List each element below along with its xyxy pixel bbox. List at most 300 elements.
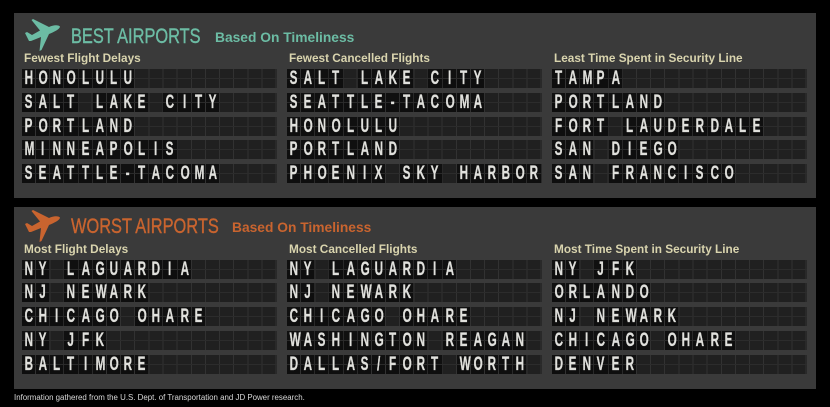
row: Salt Lake City: E: [138, 91, 146, 113]
row: NY JFK: K: [625, 258, 634, 280]
row: Honolulu: [287, 116, 542, 136]
row: Chicago O'Hare: O: [374, 305, 384, 327]
row: Chicago O'Hare: I: [55, 305, 58, 327]
row: Washington Reagan: R: [445, 329, 454, 351]
row: Minneapolis: I: [41, 138, 44, 160]
row: Chicago O'Hare: A: [166, 305, 174, 327]
row: Minneapolis: N: [67, 138, 76, 160]
row: NJ Newark: E: [81, 281, 89, 303]
row: Washington Reagan: T: [389, 329, 396, 351]
row: NY LaGuardia: D: [417, 258, 425, 280]
row: NY LaGuardia: U: [109, 258, 118, 280]
row: NY LaGuardia: L: [67, 258, 75, 280]
heading: best airports: BEST AIRPORTS: [71, 24, 201, 48]
row: Salt Lake City: [22, 93, 277, 112]
row: Honolulu: N: [318, 114, 326, 136]
row: Fort Lauderdale: E: [753, 114, 760, 136]
row: Washington Reagan: [287, 331, 542, 350]
row: Honolulu: L: [82, 67, 89, 89]
row: Dallas/Fort Worth: W: [459, 352, 470, 374]
row: NJ Newark: N: [67, 281, 76, 303]
row: Seattle-Tacoma: A: [152, 162, 160, 184]
row: Salt Lake City: K: [389, 67, 397, 89]
row: Dallas/Fort Worth: A: [346, 352, 355, 374]
row: Seattle-Tacoma: [22, 164, 277, 183]
row: Chicago O'Hare: H: [569, 329, 577, 351]
row: Seattle-Tacoma: O: [445, 91, 454, 113]
row: Portland: R: [583, 91, 591, 113]
row: Dallas/Fort Worth: [287, 354, 542, 374]
row: NY LaGuardia: A: [346, 258, 355, 280]
row: Baltimore: O: [109, 352, 119, 374]
row: Salt Lake City: K: [124, 91, 132, 113]
row: Chicago O'Hare: E: [724, 329, 732, 351]
row: Chicago O'Hare: R: [710, 329, 719, 351]
row: Chicago O'Hare: A: [431, 305, 439, 327]
row: San Diego: D: [611, 138, 620, 160]
row: Denver: E: [611, 352, 619, 374]
row: San Diego: A: [569, 138, 577, 160]
row: NY LaGuardia: A: [180, 258, 189, 280]
row: NY LaGuardia: N: [25, 258, 33, 280]
row: Phoenix Sky Harbor: [287, 164, 542, 183]
column heading: Most Flight Delays: [24, 242, 128, 256]
row: Seattle-Tacoma: M: [194, 162, 204, 184]
row: Denver: D: [555, 352, 563, 374]
row: Fort Lauderdale: U: [654, 114, 662, 136]
row: Portland: D: [389, 138, 397, 160]
row: Dallas/Fort Worth: L: [332, 352, 340, 374]
row: Dallas/Fort Worth: A: [304, 352, 312, 374]
row: Fort Lauderdale: L: [626, 114, 633, 136]
row: Seattle-Tacoma: A: [53, 162, 61, 184]
row: Portland: N: [109, 114, 118, 136]
row: Washington Reagan: W: [290, 329, 301, 351]
row: San Diego: E: [640, 138, 647, 160]
row: San Francisco: S: [696, 162, 704, 184]
row: Salt Lake City: S: [25, 91, 32, 113]
row: Fort Lauderdale: F: [555, 114, 562, 136]
row: NJ Newark: R: [654, 305, 662, 327]
row: Dallas/Fort Worth: T: [502, 352, 509, 374]
row: NY JFK: N: [555, 258, 563, 280]
row: Honolulu: L: [110, 67, 117, 89]
row: Portland: P: [290, 138, 297, 160]
row: Salt Lake City: Y: [208, 91, 216, 113]
row: Tampa: A: [569, 67, 577, 89]
row: Chicago O'Hare: E: [194, 305, 202, 327]
row: Chicago O'Hare: I: [585, 329, 588, 351]
row: Honolulu: H: [290, 114, 298, 136]
row: Phoenix Sky Harbor: H: [304, 162, 312, 184]
row: NY JFK: J: [68, 329, 74, 351]
row: Salt Lake City: S: [290, 67, 297, 89]
row: Chicago O'Hare: G: [360, 305, 369, 327]
row: Washington Reagan: A: [473, 329, 482, 351]
row: San Francisco: O: [724, 162, 733, 184]
row: Honolulu: L: [375, 114, 382, 136]
row: Chicago O'Hare: C: [290, 305, 298, 327]
row: San Francisco: I: [684, 162, 687, 184]
row: Phoenix Sky Harbor: I: [363, 162, 366, 184]
row: Chicago O'Hare: C: [332, 305, 341, 327]
row: Honolulu: U: [389, 114, 397, 136]
row: Phoenix Sky Harbor: X: [375, 162, 382, 184]
row: Phoenix Sky Harbor: N: [346, 162, 355, 184]
row: Chicago O'Hare: [22, 307, 277, 326]
row: Dallas/Fort Worth: F: [389, 352, 396, 374]
row: Fort Lauderdale: [552, 116, 807, 136]
row: San Francisco: C: [710, 162, 719, 184]
row: Phoenix Sky Harbor: Y: [431, 162, 439, 184]
row: Phoenix Sky Harbor: P: [290, 162, 297, 184]
row: Salt Lake City: A: [109, 91, 118, 113]
row: Phoenix Sky Harbor: B: [502, 162, 510, 184]
row: Baltimore: M: [95, 352, 105, 374]
row: Seattle-Tacoma: S: [25, 162, 32, 184]
row: Chicago O'Hare: R: [445, 305, 454, 327]
row: Minneapolis: L: [138, 138, 145, 160]
row: Seattle-Tacoma: -: [126, 162, 130, 184]
row: San Francisco: [552, 164, 807, 183]
row: Salt Lake City: Y: [473, 67, 481, 89]
row: Chicago O'Hare: O: [668, 329, 677, 351]
row: NY LaGuardia: A: [389, 258, 397, 280]
row: Salt Lake City: A: [39, 91, 47, 113]
column heading: Most Cancelled Flights: [289, 242, 417, 256]
row: Salt Lake City: L: [96, 91, 103, 113]
row: Baltimore: B: [25, 352, 33, 374]
row: NY LaGuardia: R: [403, 258, 411, 280]
icon: teal airplane: [25, 19, 60, 51]
row: Salt Lake City: T: [67, 91, 75, 113]
row: NJ Newark: A: [639, 305, 648, 327]
row: Portland: T: [597, 91, 605, 113]
row: NY JFK: F: [82, 329, 89, 351]
column: fewest cancelled flights: [287, 51, 542, 184]
row: Chicago O'Hare: H: [304, 305, 312, 327]
row: Portland: R: [318, 138, 326, 160]
row: Chicago O'Hare: A: [346, 305, 355, 327]
row: Seattle-Tacoma: S: [290, 91, 297, 113]
row: NY LaGuardia: G: [360, 258, 369, 280]
row: Honolulu: H: [25, 67, 33, 89]
row: Salt Lake City: C: [166, 91, 174, 113]
row: Tampa: [552, 69, 807, 88]
column heading: Least Time Spent in Security Line: [554, 51, 743, 65]
row: NY LaGuardia: A: [124, 258, 132, 280]
row: Washington Reagan: O: [403, 329, 412, 351]
row: Baltimore: T: [67, 352, 75, 374]
subheading: based on timeliness: Based On Timeliness: [215, 30, 354, 45]
heading: worst airports: WORST AIRPORTS: [71, 215, 219, 238]
row: Seattle-Tacoma: T: [347, 91, 354, 113]
row: NY LaGuardia: Y: [304, 258, 312, 280]
row: Fort Lauderdale: D: [668, 114, 676, 136]
row: NY JFK: F: [612, 258, 619, 280]
column: most flight delays: [22, 242, 277, 374]
row: Chicago O'Hare: C: [555, 329, 563, 351]
column: least time in security line: [552, 51, 807, 184]
row: Tampa: A: [611, 67, 620, 89]
row: San Francisco: C: [668, 162, 676, 184]
row: NY JFK: J: [598, 258, 604, 280]
row: San Diego: I: [628, 138, 631, 160]
row: Honolulu: U: [95, 67, 104, 89]
row: Honolulu: O: [67, 67, 76, 89]
row: Seattle-Tacoma: A: [473, 91, 482, 113]
column heading: Most Time Spent in Security Line: [554, 242, 739, 256]
row: Phoenix Sky Harbor: S: [403, 162, 411, 184]
row: Minneapolis: E: [81, 138, 89, 160]
row: Washington Reagan: G: [374, 329, 384, 351]
row: Chicago O'Hare: O: [138, 305, 147, 327]
row: Denver: V: [597, 352, 605, 374]
row: Portland: A: [625, 91, 634, 113]
row: Dallas/Fort Worth: O: [403, 352, 412, 374]
row: Washington Reagan: S: [318, 329, 326, 351]
row: Seattle-Tacoma: E: [375, 91, 382, 113]
row: Salt Lake City: [287, 69, 542, 88]
row: Portland: A: [360, 138, 369, 160]
row: Minneapolis: P: [110, 138, 117, 160]
row: NJ Newark: R: [389, 281, 397, 303]
row: Fort Lauderdale: L: [739, 114, 746, 136]
row: Honolulu: O: [39, 67, 48, 89]
row: Seattle-Tacoma: -: [391, 91, 394, 113]
row: Orlando: A: [597, 281, 606, 303]
row: Honolulu: O: [332, 114, 341, 136]
row: NJ Newark: W: [95, 281, 106, 303]
row: Phoenix Sky Harbor: O: [318, 162, 327, 184]
row: NJ Newark: J: [304, 281, 311, 303]
row: NY LaGuardia: I: [433, 258, 437, 280]
row: Portland: [287, 140, 542, 159]
row: Washington Reagan: N: [417, 329, 425, 351]
row: Dallas/Fort Worth: R: [488, 352, 496, 374]
row: Orlando: O: [639, 281, 649, 303]
row: NJ Newark: J: [569, 305, 576, 327]
row: Tampa: P: [597, 67, 605, 89]
row: Seattle-Tacoma: M: [459, 91, 469, 113]
row: San Francisco: A: [569, 162, 577, 184]
column: most cancelled flights: [287, 242, 542, 374]
row: Portland: O: [39, 114, 48, 136]
row: NJ Newark: N: [597, 305, 606, 327]
row: Honolulu: L: [347, 114, 354, 136]
row: NJ Newark: [22, 283, 277, 302]
row: Chicago O'Hare: H: [682, 329, 690, 351]
row: Dallas/Fort Worth: H: [516, 352, 524, 374]
row: Tampa: T: [555, 67, 562, 89]
row: Denver: R: [625, 352, 634, 374]
row: Washington Reagan: N: [360, 329, 369, 351]
row: Dallas/Fort Worth: O: [473, 352, 483, 374]
row: Baltimore: E: [138, 352, 146, 374]
row: Honolulu: [22, 69, 277, 88]
row: NJ Newark: A: [374, 281, 383, 303]
row: Chicago O'Hare: O: [639, 329, 649, 351]
row: Seattle-Tacoma: T: [403, 91, 410, 113]
row: Chicago O'Hare: I: [320, 305, 323, 327]
row: Chicago O'Hare: O: [403, 305, 412, 327]
row: Orlando: L: [583, 281, 590, 303]
row: Phoenix Sky Harbor: H: [459, 162, 468, 184]
row: Chicago O'Hare: [552, 331, 807, 350]
row: NJ Newark: [552, 307, 807, 326]
row: Baltimore: L: [53, 352, 60, 374]
row: NY LaGuardia: [287, 260, 542, 278]
row: Portland: D: [124, 114, 132, 136]
row: San Diego: S: [555, 138, 562, 160]
row: Portland: L: [612, 91, 619, 113]
row: Chicago O'Hare: E: [459, 305, 467, 327]
row: Chicago O'Hare: A: [611, 329, 620, 351]
row: Minneapolis: M: [25, 138, 34, 160]
row: NY LaGuardia: Y: [39, 258, 47, 280]
row: Honolulu: O: [304, 114, 313, 136]
row: NY LaGuardia: I: [168, 258, 172, 280]
row: NY LaGuardia: [22, 260, 277, 278]
row: Salt Lake City: T: [195, 91, 202, 113]
row: Fort Lauderdale: D: [710, 114, 719, 136]
row: Portland: D: [654, 91, 662, 113]
row: NY JFK: [22, 331, 277, 350]
row: NY LaGuardia: U: [374, 258, 383, 280]
row: Salt Lake City: T: [332, 67, 340, 89]
column: fewest flight delays: [22, 51, 277, 184]
row: NY JFK: Y: [39, 329, 47, 351]
row: NJ Newark: W: [625, 305, 636, 327]
row: Portland: P: [25, 114, 32, 136]
row: Orlando: R: [569, 281, 577, 303]
subheading: based on timeliness: Based On Timeliness: [232, 220, 371, 235]
row: Chicago O'Hare: H: [417, 305, 425, 327]
row: Washington Reagan: A: [304, 329, 312, 351]
column heading: Fewest Cancelled Flights: [289, 51, 430, 65]
row: Portland: L: [82, 114, 89, 136]
row: Orlando: D: [625, 281, 634, 303]
row: NY LaGuardia: A: [81, 258, 90, 280]
row: Portland: O: [304, 138, 313, 160]
row: Minneapolis: N: [53, 138, 61, 160]
row: NJ Newark: K: [668, 305, 676, 327]
row: NJ Newark: N: [332, 281, 341, 303]
row: San Francisco: A: [639, 162, 648, 184]
row: Denver: E: [569, 352, 577, 374]
row: Chicago O'Hare: H: [39, 305, 47, 327]
row: Denver: [552, 354, 807, 374]
row: NY LaGuardia: G: [95, 258, 104, 280]
row: Phoenix Sky Harbor: R: [530, 162, 538, 184]
row: NY LaGuardia: L: [332, 258, 340, 280]
row: NY LaGuardia: A: [445, 258, 454, 280]
row: Phoenix Sky Harbor: K: [417, 162, 425, 184]
row: NJ Newark: E: [346, 281, 354, 303]
row: Chicago O'Hare: G: [95, 305, 104, 327]
row: Dallas/Fort Worth: L: [318, 352, 325, 374]
row: Fort Lauderdale: R: [583, 114, 591, 136]
row: NJ Newark: E: [611, 305, 619, 327]
row: Chicago O'Hare: H: [152, 305, 160, 327]
row: Honolulu: U: [124, 67, 132, 89]
row: NJ Newark: R: [124, 281, 132, 303]
row: Washington Reagan: E: [459, 329, 467, 351]
row: Seattle-Tacoma: [287, 93, 542, 112]
row: Seattle-Tacoma: E: [110, 162, 117, 184]
row: Seattle-Tacoma: A: [318, 91, 326, 113]
row: NJ Newark: N: [25, 281, 33, 303]
row: Seattle-Tacoma: L: [361, 91, 368, 113]
row: Minneapolis: A: [95, 138, 104, 160]
row: Minneapolis: I: [154, 138, 157, 160]
row: NJ Newark: N: [290, 281, 298, 303]
row: Portland: R: [53, 114, 61, 136]
row: Denver: N: [583, 352, 591, 374]
row: Phoenix Sky Harbor: R: [488, 162, 496, 184]
row: Fort Lauderdale: O: [569, 114, 578, 136]
row: Fort Lauderdale: R: [696, 114, 704, 136]
row: Portland: A: [95, 114, 104, 136]
row: Dallas/Fort Worth: /: [377, 352, 380, 374]
row: NY LaGuardia: D: [152, 258, 160, 280]
row: Portland: N: [639, 91, 648, 113]
row: Portland: P: [555, 91, 562, 113]
row: Minneapolis: O: [124, 138, 133, 160]
panel: best airports: [14, 13, 816, 198]
row: Chicago O'Hare: A: [696, 329, 704, 351]
panel: worst airports: [14, 207, 816, 389]
row: Washington Reagan: N: [516, 329, 524, 351]
row: Chicago O'Hare: O: [109, 305, 119, 327]
row: Seattle-Tacoma: T: [82, 162, 89, 184]
row: Salt Lake City: C: [431, 67, 439, 89]
icon: orange airplane: [25, 210, 60, 242]
column heading: Fewest Flight Delays: [24, 51, 141, 65]
row: Dallas/Fort Worth: D: [290, 352, 298, 374]
row: Phoenix Sky Harbor: E: [332, 162, 340, 184]
row: Washington Reagan: A: [502, 329, 510, 351]
row: San Francisco: F: [612, 162, 619, 184]
row: Salt Lake City: L: [318, 67, 325, 89]
row: Fort Lauderdale: E: [682, 114, 690, 136]
row: NJ Newark: [287, 283, 542, 302]
row: Orlando: N: [611, 281, 620, 303]
row: Portland: [22, 116, 277, 136]
row: Baltimore: R: [124, 352, 132, 374]
row: Fort Lauderdale: T: [597, 114, 605, 136]
row: San Diego: [552, 140, 807, 159]
row: NY JFK: Y: [569, 258, 577, 280]
row: NJ Newark: W: [360, 281, 371, 303]
row: Dallas/Fort Worth: T: [431, 352, 439, 374]
row: San Diego: G: [654, 138, 663, 160]
row: NY JFK: K: [95, 329, 104, 351]
row: Phoenix Sky Harbor: A: [473, 162, 482, 184]
row: Orlando: [552, 283, 807, 302]
row: Baltimore: A: [39, 352, 47, 374]
row: Portland: [552, 93, 807, 112]
row: NY JFK: N: [25, 329, 33, 351]
row: NY LaGuardia: N: [290, 258, 298, 280]
row: San Diego: N: [583, 138, 591, 160]
row: Portland: O: [569, 91, 578, 113]
row: NJ Newark: K: [403, 281, 411, 303]
row: Baltimore: I: [84, 352, 87, 374]
row: Fort Lauderdale: A: [724, 114, 733, 136]
row: Baltimore: [22, 354, 277, 374]
row: Portland: N: [374, 138, 383, 160]
